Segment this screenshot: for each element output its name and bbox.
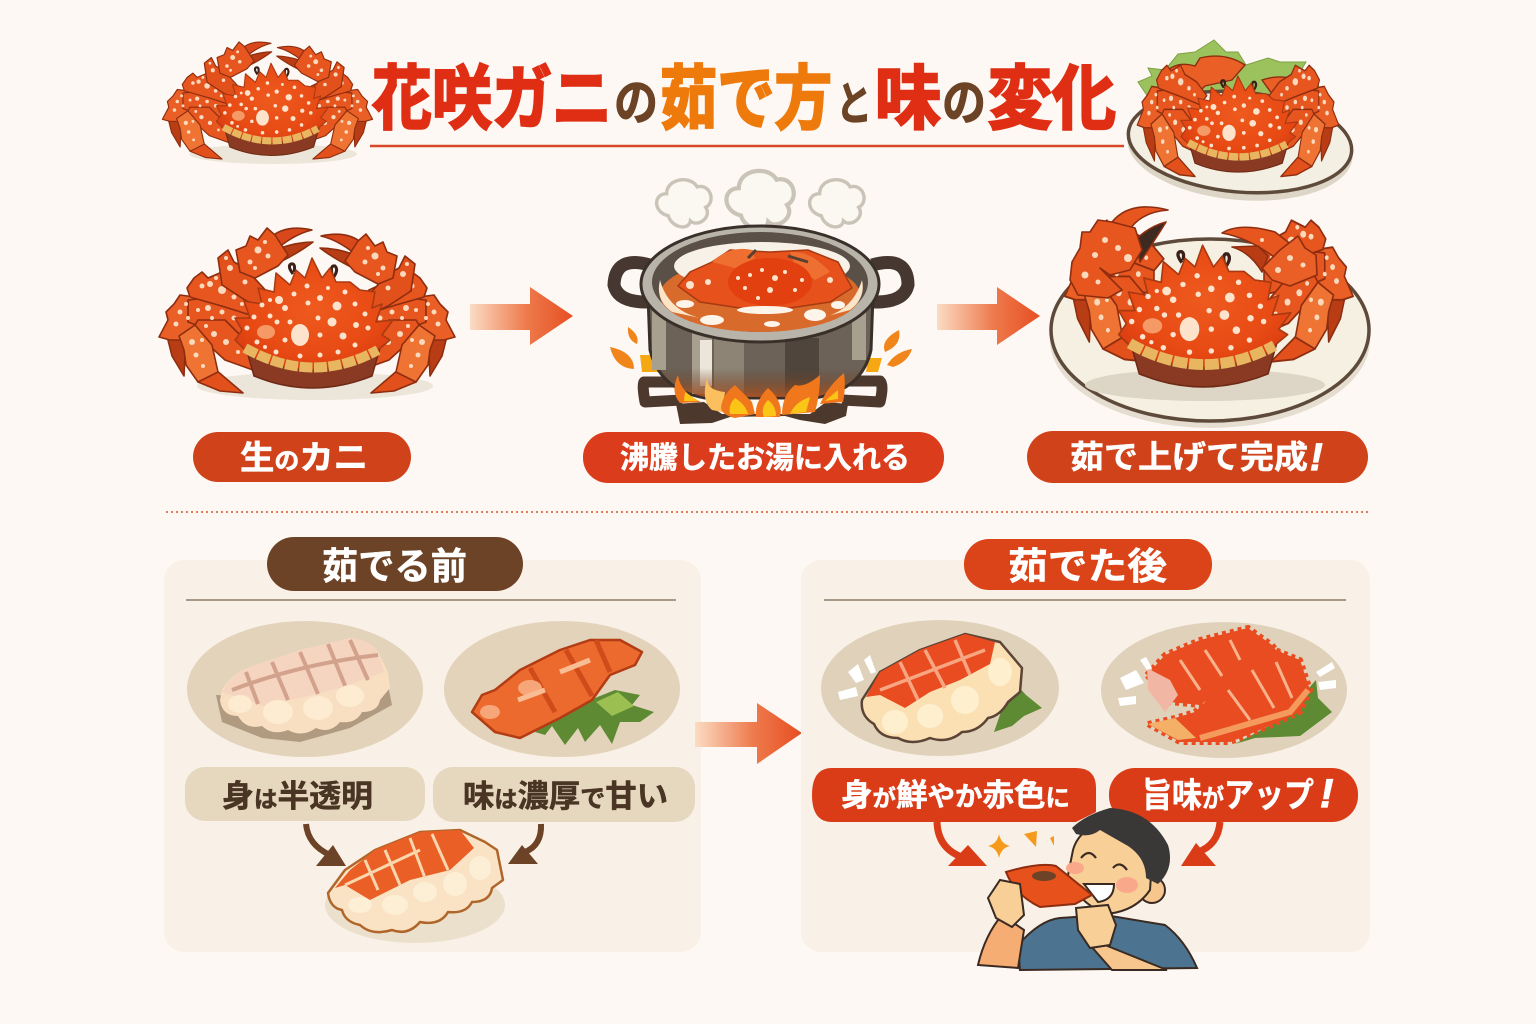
panel: after boiling <box>801 539 1370 952</box>
arrow: raw to pot <box>470 287 573 345</box>
icon: boiled meat on plate <box>821 620 1059 756</box>
arrow: red right <box>1181 822 1220 866</box>
label: raw crab: 生のカニ <box>240 439 368 476</box>
label: finished: ! <box>1310 437 1323 479</box>
title underline <box>370 145 1124 147</box>
title <box>372 60 1116 138</box>
icon: left claw <box>1070 207 1168 298</box>
label: put in boiling water: 沸騰したお湯に入れる <box>620 442 910 475</box>
icon: finished crab on plate <box>1050 207 1370 428</box>
icon: steam <box>657 171 864 229</box>
title: の <box>614 75 658 131</box>
icon: combined meat <box>325 830 505 943</box>
label: rich and sweet taste: 味は濃厚で甘い <box>463 779 668 814</box>
label: flesh turns bright red: 身が鮮やか赤色に <box>841 778 1070 813</box>
panel: before boiling <box>164 537 701 952</box>
icon: crab in pot <box>678 249 852 308</box>
title: と <box>836 78 872 130</box>
arrow: brown right <box>508 824 541 864</box>
icon: crab beside title <box>162 42 373 164</box>
label: umami up <box>1109 768 1358 822</box>
arrow: red left <box>937 822 987 866</box>
heading: after boiling: 茹でた後 <box>1008 546 1167 587</box>
icon: stove <box>640 355 882 424</box>
icon: small crab on plate <box>1123 40 1357 210</box>
arrow: pot to finished <box>937 287 1040 345</box>
arrow: before to after <box>695 703 802 764</box>
label: rich and sweet taste <box>433 767 695 822</box>
icon: pot on fire <box>610 171 912 424</box>
label: flesh is translucent <box>185 767 425 821</box>
arrow: brown left <box>306 824 346 866</box>
icon: raw meat on plate <box>187 621 423 757</box>
label: umami up: ! <box>1320 772 1333 816</box>
icon: raw crab <box>159 228 455 400</box>
icon: two boiled legs on plate <box>1101 622 1347 758</box>
title: 茹で方 <box>660 60 832 138</box>
label: put in boiling water <box>583 432 944 483</box>
icon: flames <box>610 327 912 418</box>
label: finished <box>1027 431 1368 483</box>
label: flesh is translucent: 身は半透明 <box>222 779 373 814</box>
icon: sparkles <box>988 831 1054 858</box>
title: の <box>942 75 986 131</box>
title: 花咲ガニ <box>372 60 612 138</box>
label: flesh turns bright red <box>812 768 1096 822</box>
label: raw crab <box>193 432 411 482</box>
title: 変化 <box>988 60 1116 138</box>
icon: right claw <box>1222 227 1317 286</box>
heading: before boiling <box>267 537 523 591</box>
heading: after boiling <box>964 539 1212 590</box>
icon: man eating crab <box>978 808 1197 970</box>
heading: before boiling: 茹でる前 <box>322 546 467 587</box>
label: finished: 茹で上げて完成 <box>1070 439 1308 475</box>
label: umami up: 旨味がアップ <box>1142 777 1314 815</box>
title: 味 <box>875 60 941 138</box>
icon: shell-on leg on plate <box>444 621 680 757</box>
